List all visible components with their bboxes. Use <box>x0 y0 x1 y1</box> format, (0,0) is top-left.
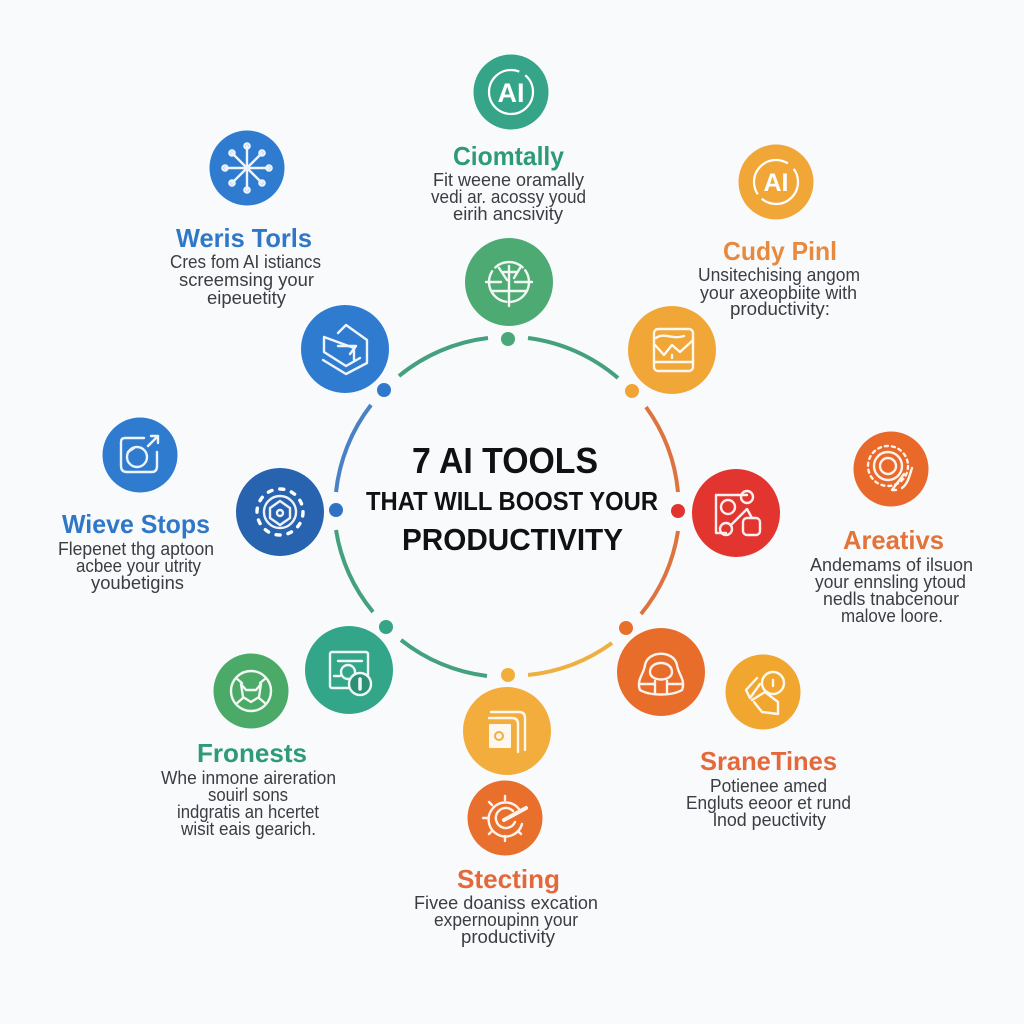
outer item: Weris Torls: Cres fom AI istiancs <box>170 252 321 272</box>
outer item: Wieve Stops: Flepenet thg aptoon <box>58 539 214 559</box>
outer item: Cudy Pinl: your axeopbiite with <box>700 283 857 303</box>
outer item: Wieve Stops: youbetigins <box>91 573 184 593</box>
inner icon: teal search card <box>305 626 393 714</box>
outer item: Weris Torls: Weris Torls <box>176 223 312 253</box>
outer item: Ciomtally: Ciomtally <box>453 141 565 171</box>
outer item: Areativs: your ennsling ytoud <box>815 572 966 592</box>
outer item: Cudy Pinl: Unsitechising angom <box>698 265 860 285</box>
outer item: Stecting: expernoupinn your <box>434 910 578 930</box>
inner icon: orange chart card <box>628 306 716 394</box>
inner icon: yellow stacked pages <box>463 687 551 775</box>
inner icon: red shapes <box>692 469 780 557</box>
outer item: Areativs <box>810 432 973 626</box>
outer item: Fronests <box>161 654 336 839</box>
outer item: Areativs: malove loore. <box>841 606 943 626</box>
outer item: Weris Torls <box>170 130 321 308</box>
outer item: SraneTines: Engluts eeoor et rund <box>686 793 851 813</box>
title: PRODUCTIVITY <box>402 522 623 557</box>
outer item: Stecting <box>414 780 598 947</box>
outer item: Stecting: Stecting <box>457 864 560 894</box>
inner icon: blue shield burst <box>236 468 324 556</box>
outer item: Areativs: Andemams of ilsuon <box>810 555 973 575</box>
outer item: Weris Torls: screemsing your <box>179 270 314 290</box>
outer item: Cudy Pinl: Cudy Pinl <box>723 236 837 266</box>
outer item: Stecting: productivity <box>461 927 555 947</box>
outer item: Ciomtally: AI <box>498 78 524 108</box>
outer item: Ciomtally: eirih ancsivity <box>453 204 563 224</box>
outer item: Weris Torls: eipeuetity <box>207 288 286 308</box>
outer item: Wieve Stops: acbee your utrity <box>76 556 201 576</box>
outer item: Cudy Pinl <box>698 144 860 319</box>
central ring with arcs and dots <box>329 332 685 682</box>
title: 7 AI TOOLS <box>412 440 598 481</box>
outer item: Ciomtally: Fit weene oramally <box>433 170 584 190</box>
outer item: Wieve Stops <box>58 418 214 593</box>
outer item: Ciomtally <box>431 54 586 224</box>
inner icon: orange figure <box>617 628 705 716</box>
outer item: SraneTines: lnod peuctivity <box>713 810 826 830</box>
outer item: Areativs: Areativs <box>843 525 944 555</box>
outer item: Fronests: wisit eais gearich. <box>180 819 316 839</box>
outer item: SraneTines <box>686 654 851 830</box>
inner icon: green globe <box>465 238 553 326</box>
outer item: Fronests: indgratis an hcertet <box>177 802 319 822</box>
outer item: Areativs: nedls tnabcenour <box>823 589 959 609</box>
outer item: Cudy Pinl: AI <box>764 169 788 197</box>
title <box>366 440 658 557</box>
outer item: Fronests: Whe inmone aireration <box>161 768 336 788</box>
outer item: Stecting: Fivee doaniss excation <box>414 893 598 913</box>
outer item: SraneTines: Potienee amed <box>710 776 827 796</box>
outer item: Ciomtally: vedi ar. acossy youd <box>431 187 586 207</box>
outer item: Fronests: souirl sons <box>208 785 288 805</box>
outer item: SraneTines: SraneTines <box>700 746 837 776</box>
title: THAT WILL BOOST YOUR <box>366 486 658 516</box>
inner icon: blue cube <box>301 305 389 393</box>
outer item: Fronests: Fronests <box>197 738 307 768</box>
outer item: Cudy Pinl: productivity: <box>730 299 830 319</box>
outer item: Wieve Stops: Wieve Stops <box>62 509 210 539</box>
